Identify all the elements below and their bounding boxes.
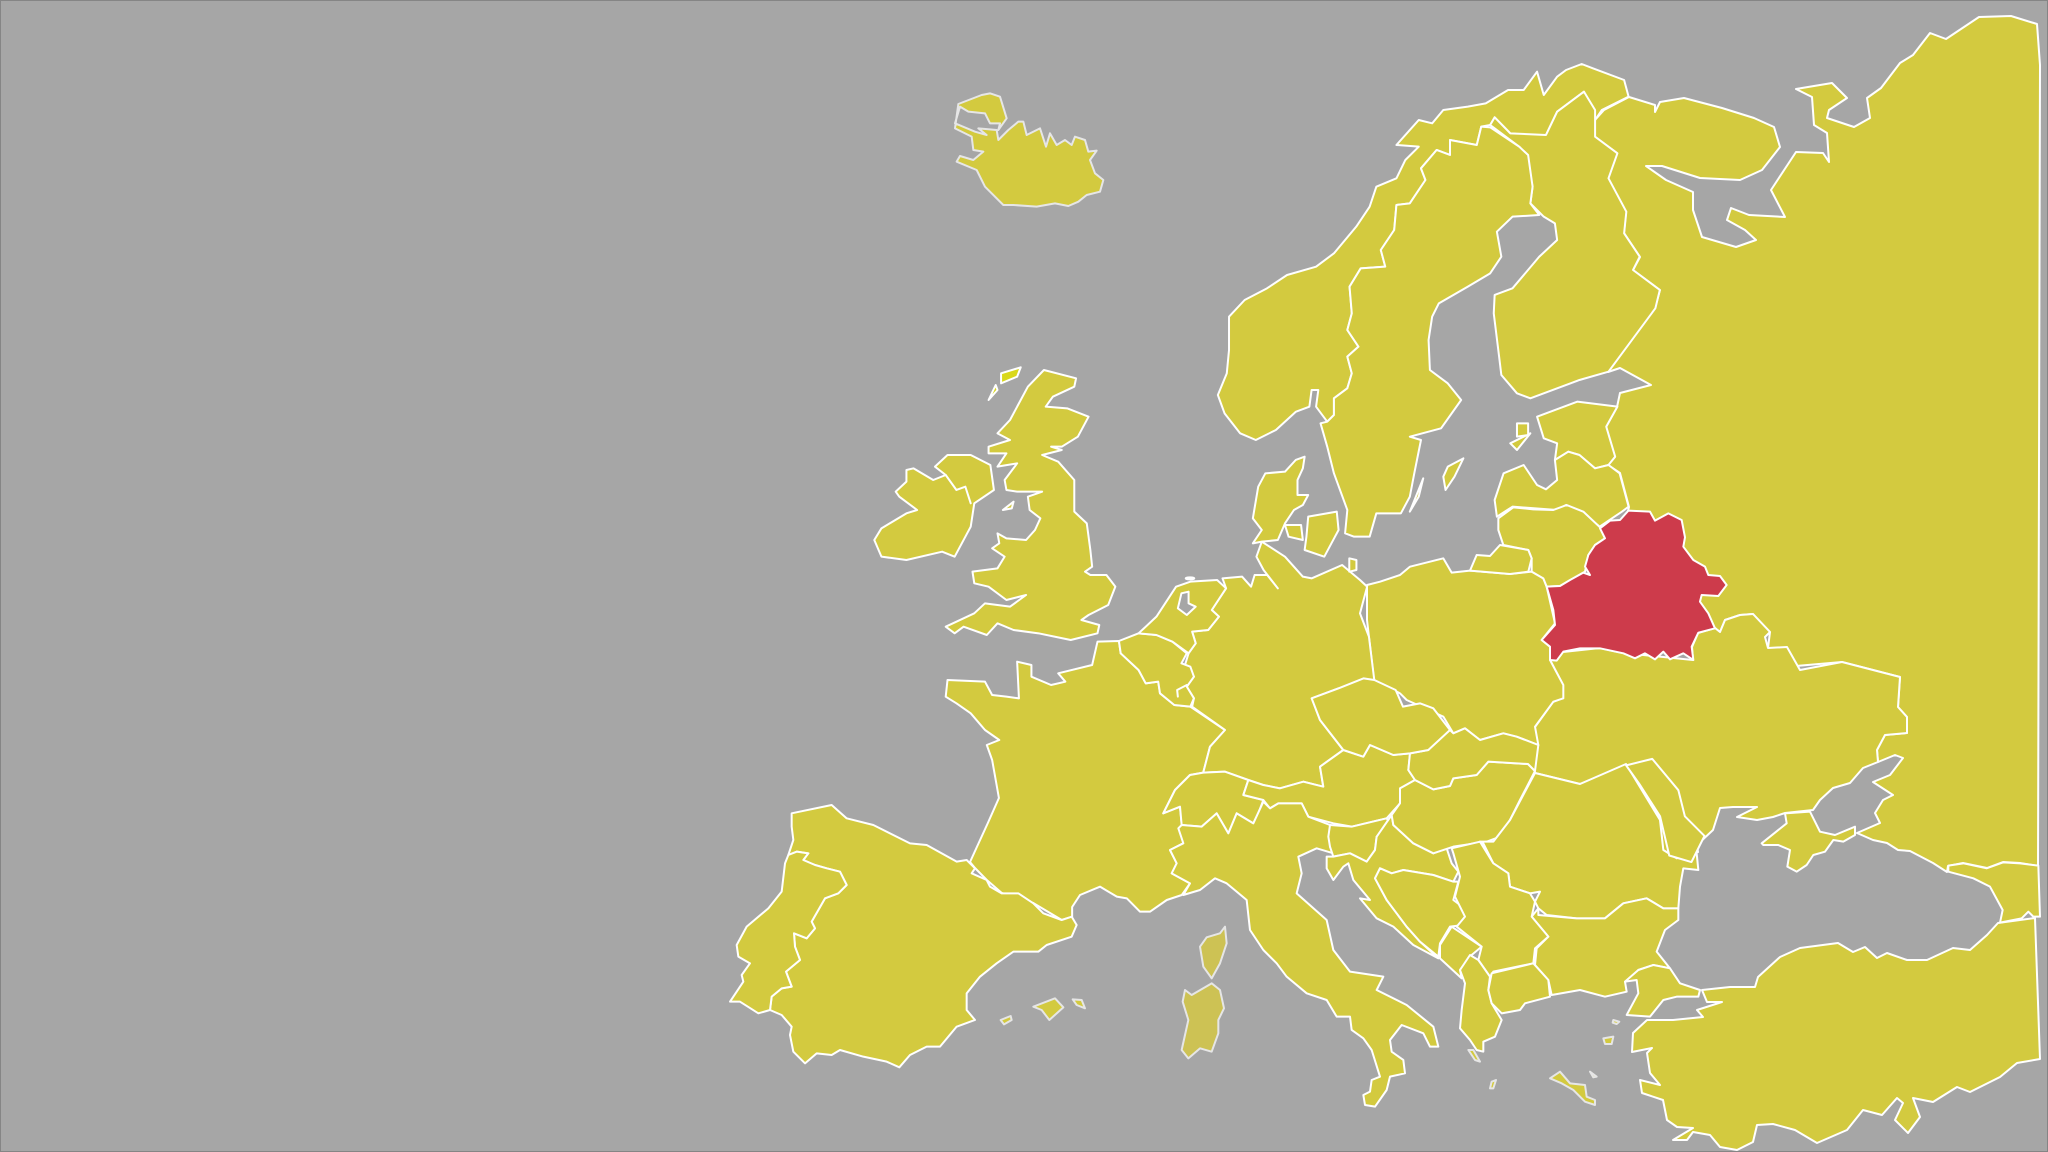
island: Isle of Man bbox=[1003, 502, 1014, 510]
island: Menorca bbox=[1073, 999, 1085, 1008]
country: Lithuania bbox=[1498, 505, 1605, 587]
country: Russia bbox=[1595, 16, 2040, 872]
Baltic south group bbox=[1367, 505, 1605, 745]
region: Georgia band bbox=[1762, 812, 2040, 923]
country: Slovakia bbox=[1408, 728, 1538, 789]
country: Belgium and Luxembourg bbox=[1119, 633, 1194, 707]
country: Albania bbox=[1460, 955, 1502, 1052]
Balkans group bbox=[1440, 764, 1700, 1105]
Iberia group bbox=[730, 805, 1085, 1067]
island: Ibiza bbox=[1001, 1016, 1012, 1024]
country: Czech Republic bbox=[1312, 678, 1450, 757]
island: Iceland bbox=[955, 93, 1103, 207]
country: Bosnia and Herzegovina bbox=[1375, 868, 1467, 957]
country: Serbia bbox=[1452, 842, 1548, 977]
border: Northern Ireland bbox=[946, 475, 971, 503]
country: Hungary bbox=[1392, 762, 1535, 853]
island: Funen bbox=[1285, 525, 1303, 540]
country: Great Britain bbox=[946, 370, 1115, 640]
island: Corfu bbox=[1468, 1050, 1480, 1062]
island: Zealand bbox=[1305, 512, 1339, 557]
country: Slovenia bbox=[1328, 818, 1392, 862]
country: Estonia bbox=[1537, 402, 1617, 468]
island: Crete bbox=[1550, 1072, 1595, 1105]
country: Portugal bbox=[730, 852, 847, 1013]
country: Austria bbox=[1243, 745, 1415, 827]
island: Gotland bbox=[1443, 458, 1463, 490]
country: Moldova bbox=[1626, 759, 1704, 862]
island: Rugen bbox=[1349, 558, 1356, 572]
country: Italy bbox=[1170, 802, 1438, 1107]
Scandinavia and Baltic group bbox=[1218, 64, 1660, 537]
country: Latvia bbox=[1495, 452, 1629, 527]
island: Lesbos bbox=[1603, 1037, 1613, 1044]
country: Finland bbox=[1490, 92, 1660, 398]
lake: IJsselmeer bbox=[1178, 592, 1196, 615]
island: Lewis bbox=[1001, 367, 1021, 383]
country: Sweden bbox=[1321, 127, 1539, 537]
country: Ireland bbox=[874, 455, 994, 560]
country: Netherlands bbox=[1139, 580, 1226, 653]
country: Norway bbox=[1218, 64, 1629, 440]
country: France bbox=[946, 641, 1225, 920]
island: Texel bbox=[1186, 577, 1194, 579]
region: Kaliningrad bbox=[1470, 545, 1532, 574]
country: Spain bbox=[770, 805, 1077, 1067]
country: Turkey bbox=[1632, 918, 2040, 1150]
country: Switzerland bbox=[1163, 772, 1263, 833]
country: Bulgaria bbox=[1532, 898, 1678, 997]
island: Uist bbox=[989, 385, 997, 400]
Alps and Italy group bbox=[1163, 678, 1538, 1107]
country: Romania bbox=[1480, 764, 1698, 918]
country: Germany bbox=[1185, 542, 1374, 788]
island: Corsica bbox=[1200, 927, 1227, 978]
Western Europe group bbox=[874, 367, 1374, 920]
island: Saaremaa bbox=[1510, 433, 1530, 450]
country: Croatia bbox=[1327, 815, 1458, 958]
country: Montenegro bbox=[1440, 927, 1482, 978]
country: North Macedonia bbox=[1488, 963, 1550, 1013]
island: Lemnos bbox=[1613, 1020, 1619, 1024]
island: Mallorca bbox=[1033, 998, 1063, 1020]
country: Poland bbox=[1367, 558, 1563, 745]
island: Hiiumaa bbox=[1517, 423, 1528, 437]
island: Sardinia bbox=[1182, 983, 1224, 1058]
country: Ukraine bbox=[1528, 614, 1907, 858]
country: Denmark Jutland bbox=[1253, 457, 1308, 543]
border: Luxembourg bbox=[1177, 685, 1187, 697]
island: Rhodes bbox=[1590, 1072, 1597, 1077]
country: Belarus highlighted bbox=[1542, 511, 1727, 661]
region: Crimea bbox=[1762, 812, 1855, 872]
island: Oland bbox=[1410, 478, 1423, 512]
island: Kefalonia bbox=[1490, 1080, 1496, 1088]
region: European Turkey bbox=[1625, 965, 1700, 1017]
